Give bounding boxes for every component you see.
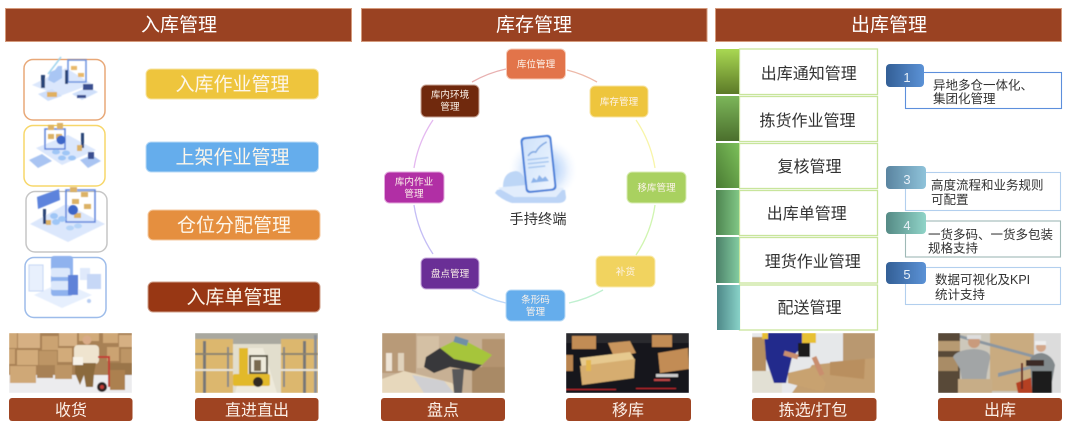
row: picking operation [716, 96, 878, 142]
callout 3 [886, 166, 1060, 210]
photo: transfer [566, 333, 689, 393]
label: receiving: 收货 [55, 402, 87, 420]
label: picking and packing [752, 398, 876, 421]
row: tallying operation [716, 237, 878, 283]
heading: outbound [716, 8, 1062, 42]
heading: inbound [6, 8, 352, 42]
node: replenishment: 补货 [616, 266, 636, 278]
node: barcode management: 条形码 [521, 294, 550, 306]
label: stocktaking [381, 398, 505, 421]
callout 1 [886, 64, 1062, 108]
label: picking and packing: 拣选/打包 [779, 402, 847, 420]
pill: putaway operation: 上架作业管理 [175, 146, 290, 168]
pill: inbound order: 入库单管理 [186, 286, 282, 308]
ring of connecting arcs [414, 69, 655, 303]
node: stock management: 库存管理 [600, 96, 639, 108]
node: stocktaking management [421, 258, 479, 289]
row: tallying operation: 理货作业管理 [765, 253, 861, 271]
icon: inbound operations illustration [24, 57, 105, 120]
callout 4: 一货多码、一货多包装 [928, 227, 1053, 242]
label: cross docking [195, 398, 318, 421]
pill: inbound operation [146, 69, 318, 99]
node: slot management [506, 49, 566, 79]
callout 5 [886, 262, 1060, 304]
pill: slot allocation: 仓位分配管理 [177, 214, 291, 236]
callout 5: 5 [903, 267, 911, 282]
node: transfer management: 移库管理 [637, 182, 676, 194]
panel: outbound management [716, 8, 1062, 330]
callout 1: 异地多仓一体化、 [933, 78, 1033, 92]
row: review [716, 143, 878, 188]
heading: inventory [362, 8, 707, 42]
callout 4: 4 [903, 218, 911, 233]
photo: picking and packing [752, 333, 875, 393]
pill: putaway operation [146, 142, 318, 172]
label: handheld terminal: 手持终端 [509, 211, 567, 228]
callout 3: 高度流程和业务规则 [931, 178, 1044, 192]
node: barcode management [506, 290, 565, 321]
callout 1: 集团化管理 [933, 91, 996, 106]
node: in-warehouse operation: 库内作业 [395, 176, 434, 188]
node: environment management: 库内环境 [431, 89, 470, 101]
row: delivery [717, 285, 878, 330]
photo: stocktaking [382, 333, 505, 393]
label: cross docking: 直进直出 [225, 402, 289, 420]
row: review: 复核管理 [777, 158, 842, 176]
node: environment management: 管理 [440, 101, 460, 113]
heading: inventory: 库存管理 [496, 14, 572, 36]
icon: inbound order illustration [25, 256, 106, 318]
row: outbound notice: 出库通知管理 [761, 65, 857, 83]
callout 4: 规格支持 [928, 240, 978, 256]
label: transfer: 移库 [612, 402, 644, 420]
panel: inventory management [362, 8, 707, 321]
row: outbound order: 出库单管理 [767, 205, 847, 223]
node: stock management [590, 86, 648, 117]
panel: inbound management [6, 8, 352, 318]
row: picking operation: 拣货作业管理 [759, 112, 856, 130]
label: receiving [9, 398, 132, 421]
node: slot management: 库位管理 [517, 58, 556, 70]
icon: slot allocation illustration [26, 187, 107, 252]
pill: inbound order [148, 282, 320, 312]
node: transfer management [627, 172, 686, 203]
label: outbound: 出库 [984, 402, 1016, 420]
heading: outbound: 出库管理 [851, 14, 927, 36]
photo: cross docking [195, 333, 318, 393]
node: in-warehouse operation: 管理 [404, 188, 424, 200]
row: delivery: 配送管理 [777, 299, 842, 317]
label: outbound [938, 398, 1062, 421]
heading: inbound: 入库管理 [141, 14, 217, 36]
pill: slot allocation [148, 210, 320, 240]
node: replenishment [596, 256, 655, 287]
row: outbound order [716, 190, 878, 236]
callout 5: 统计支持 [935, 287, 985, 302]
node: barcode management: 管理 [526, 306, 546, 318]
photo: outbound [938, 333, 1061, 393]
callout 3: 可配置 [931, 193, 969, 207]
icon: handheld terminal [495, 134, 579, 204]
row: outbound notice [716, 49, 878, 94]
photo: receiving [9, 333, 132, 393]
label: transfer [566, 398, 691, 421]
icon: shelving illustration [24, 123, 105, 186]
node: in-warehouse operation [384, 172, 444, 203]
pill: inbound operation: 入库作业管理 [175, 74, 290, 96]
node: environment management [421, 85, 479, 117]
callout 5: 数据可视化及KPI [935, 272, 1030, 287]
callout 1: 1 [903, 70, 911, 85]
node: stocktaking management: 盘点管理 [431, 268, 470, 280]
callout 4 [886, 212, 1060, 257]
label: stocktaking: 盘点 [427, 400, 459, 420]
callout 3: 3 [903, 172, 911, 187]
